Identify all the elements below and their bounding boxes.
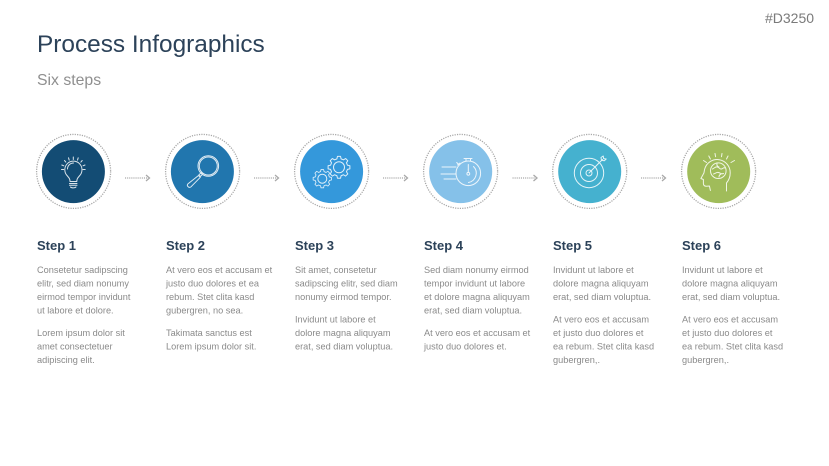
step 5 body text [553,265,654,365]
subtitle: Six steps [37,72,101,89]
reference code: #D3250 [765,10,814,26]
step 3 body text: nonumy eirmod tempor. [295,292,392,302]
step 6 body text [682,265,783,365]
step 2 body text: Takimata sanctus est [166,328,252,338]
step 1 body text: Lorem ipsum dolor sit [37,328,125,338]
step 3 body text: Invidunt ut labore et [295,314,376,324]
step 1 body text: Consetetur sadipscing [37,265,128,275]
step 6 body text: At vero eos et accusam [682,314,778,324]
step 5 panel [553,134,654,365]
step 5 body text: et justo duo dolores et [553,328,644,338]
step 3 heading: Step 3 [295,238,334,253]
arrow 5 to 6 [641,175,666,181]
step 4 body text: et dolore magna aliquyam [424,292,530,302]
icon: magnifying glass in blue circle [166,134,240,208]
step 1 body text: eirmod tempor invidunt [37,292,131,302]
step 1 body text: adipiscing elit. [37,355,95,365]
step 2 heading: Step 2 [166,238,205,253]
step 2 body text: rebum. Stet clita kasd [166,292,254,302]
step 4 body text: justo duo dolores et. [423,342,507,352]
step 2 body text: Lorem ipsum dolor sit. [166,342,256,352]
step 3 body text [295,265,398,352]
step 1 panel [37,134,131,365]
step 6 body text: dolore magna aliquyam [682,278,778,288]
step 3 body text: sadipscing elitr, sed diam [295,278,398,288]
step 4 body text [423,265,531,352]
step 3 body text: Sit amet, consetetur [295,265,377,275]
step 5 body text: gubergren,. [553,355,600,365]
arrow 3 to 4 [383,175,408,181]
title: Process Infographics [37,31,265,58]
icon: stopwatch in light blue circle [424,134,498,208]
step 4 body text: tempor invidunt ut labore [424,278,525,288]
step 4 body text: At vero eos et accusam et [424,328,531,338]
arrow 2 to 3 [254,175,278,181]
step 5 body text: erat, sed diam voluptua. [553,292,651,302]
step 6 body text: Invidunt ut labore et [682,265,763,275]
arrow 1 to 2 [125,175,150,181]
step 1 body text: ut labore et dolore. [37,306,114,316]
icon: gears in bright blue circle [295,134,369,208]
icon: head with brain in green circle [682,134,756,208]
step 1 body text [37,265,131,365]
step 3 panel [295,134,398,352]
arrow 4 to 5 [512,175,537,181]
step 2 body text: gubergren, no sea. [166,306,243,316]
step 6 panel [682,134,783,365]
step 3 body text: dolore magna aliquyam [295,328,391,338]
step 6 heading: Step 6 [682,238,721,253]
step 2 body text: justo duo dolores et ea [165,278,260,288]
step 2 panel [165,134,273,352]
step 4 body text: erat, sed diam voluptua. [424,306,522,316]
step 6 body text: gubergren,. [682,355,729,365]
step 6 body text: et justo duo dolores et [682,328,773,338]
step 6 body text: erat, sed diam voluptua. [682,292,780,302]
step 5 heading: Step 5 [553,238,592,253]
step 1 body text: elitr, sed diam nonumy [37,278,129,288]
step 4 body text: Sed diam nonumy eirmod [424,265,529,275]
step 5 body text: Invidunt ut labore et [553,265,634,275]
step 6 body text: ea rebum. Stet clita kasd [682,342,783,352]
step 4 panel [423,134,531,352]
step 1 heading: Step 1 [37,238,76,253]
step 1 body text: amet consectetuer [37,342,113,352]
step 2 body text: At vero eos et accusam et [166,265,273,275]
step 5 body text: At vero eos et accusam [553,314,649,324]
step 4 heading: Step 4 [424,238,464,253]
step 3 body text: erat, sed diam voluptua. [295,342,393,352]
step 5 body text: ea rebum. Stet clita kasd [553,342,654,352]
icon: target with arrow in teal circle [553,134,627,208]
step 2 body text [165,265,273,352]
step 5 body text: dolore magna aliquyam [553,278,649,288]
icon: light bulb in dark blue circle [37,134,111,208]
